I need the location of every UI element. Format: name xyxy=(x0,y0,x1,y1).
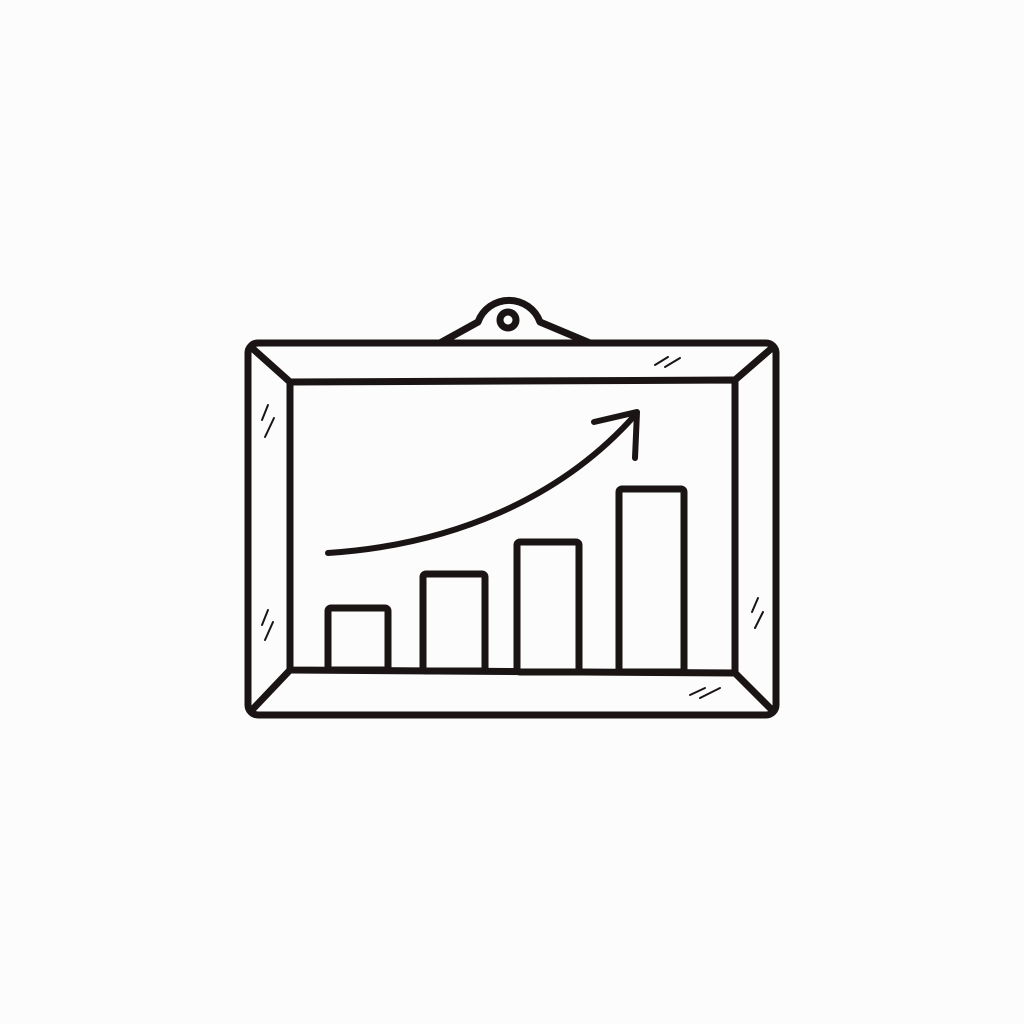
icon: hanger xyxy=(440,300,590,343)
glare marks xyxy=(262,357,763,698)
bar chart xyxy=(328,489,684,672)
frame xyxy=(248,343,776,715)
arrow: growth trend xyxy=(328,412,637,553)
